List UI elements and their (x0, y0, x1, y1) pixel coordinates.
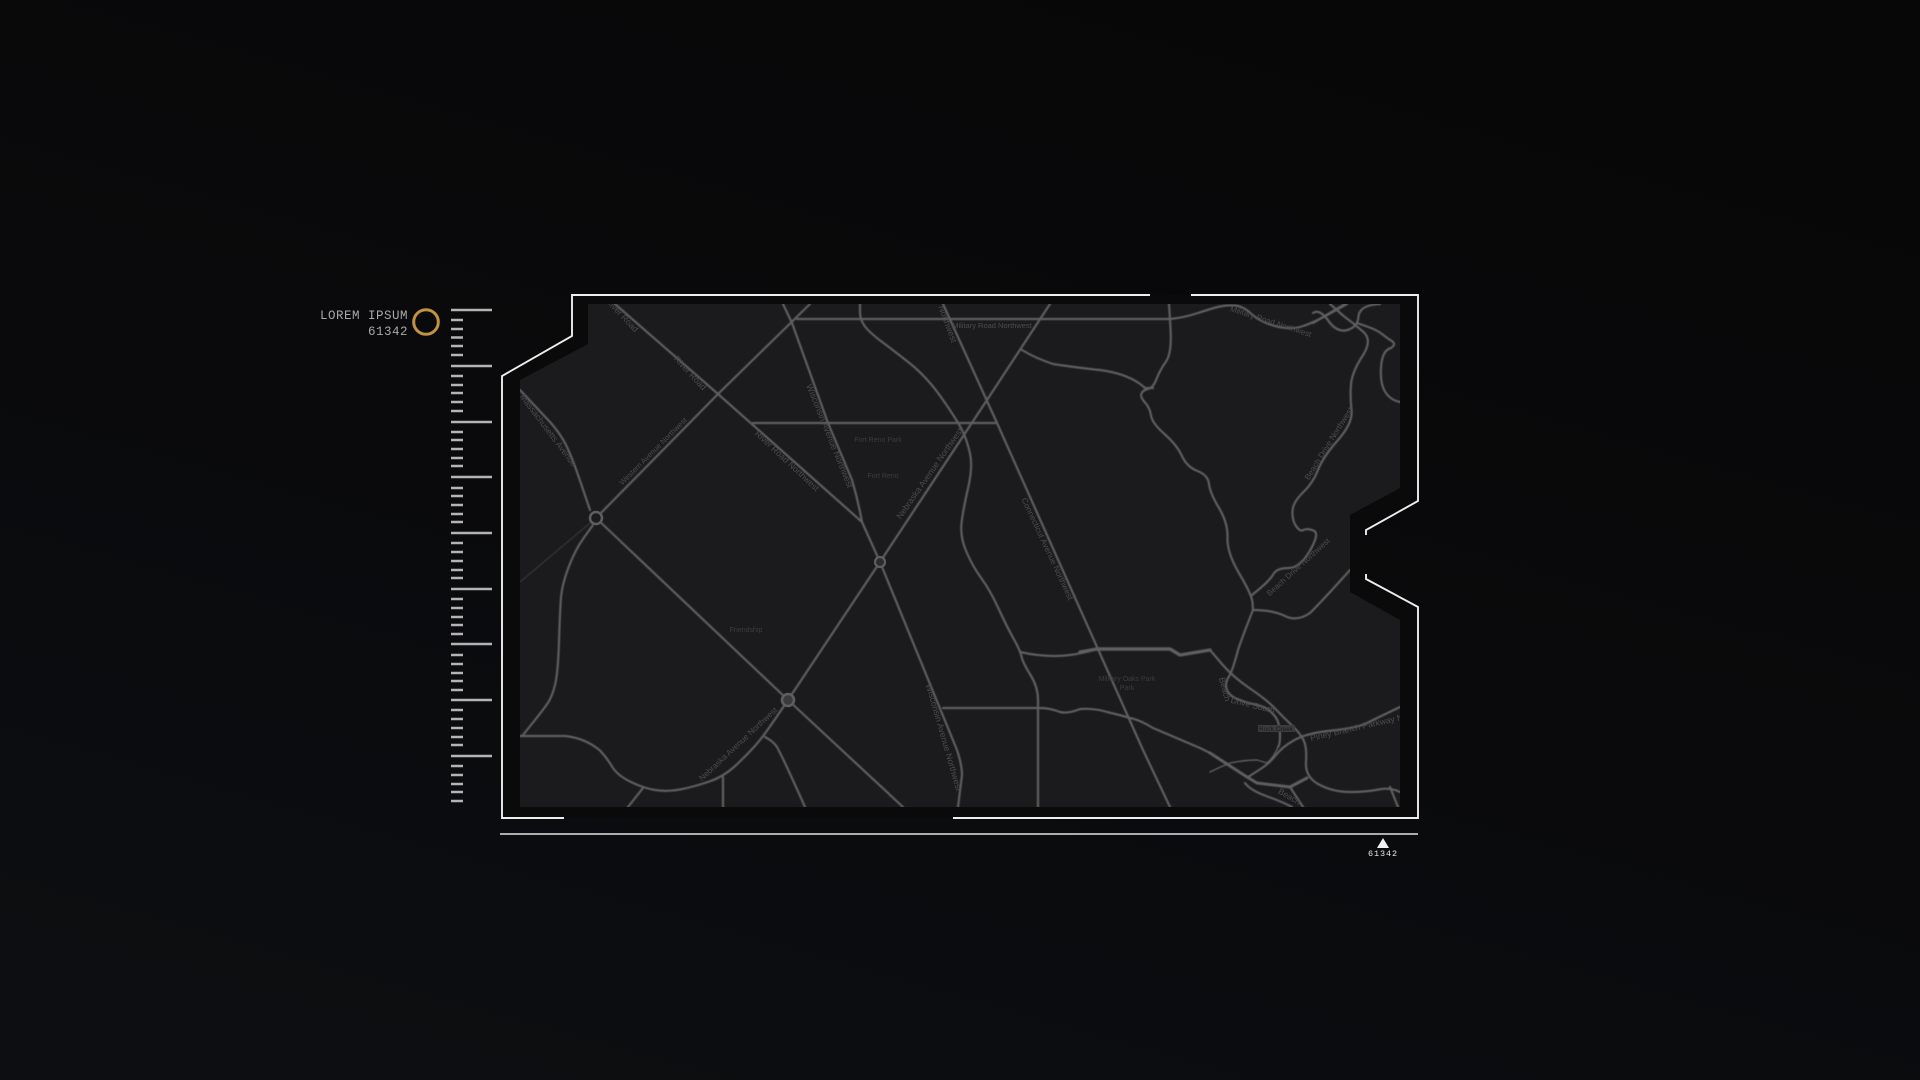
street labels: Beach Drive Northwest (1265, 536, 1332, 598)
street labels: River Road Northwest (753, 428, 822, 494)
label text: lorem ipsum: LOREM IPSUM (320, 309, 408, 323)
panel: map (518, 296, 1436, 807)
street labels: Wisconsin Avenue Northwest (804, 382, 855, 490)
marker: triangle and value: 61342 (1368, 849, 1398, 859)
street labels: River Road (604, 296, 641, 334)
road network (520, 304, 1400, 807)
street labels: Massachusetts Avenue (518, 392, 579, 469)
street labels: Wisconsin Avenue Northwest (924, 682, 964, 793)
panel: frame backing (502, 295, 1418, 818)
icon: orange ring (414, 310, 438, 334)
street labels: Connecticut Avenue Northwest (1020, 496, 1075, 602)
marker: triangle and value (1368, 838, 1398, 859)
street labels: River Road (672, 354, 709, 392)
street labels: Military Road Northwest (952, 321, 1033, 330)
street labels: Piney Branch Parkway Northwest (1309, 704, 1436, 743)
street labels: Beach (1217, 676, 1233, 702)
street labels: Beach Drive Northwest (1303, 405, 1355, 482)
street labels: Nebraska Avenue Northwest (894, 425, 965, 521)
street labels: Drive South (1230, 695, 1276, 715)
street labels: Western Avenue Northwest (618, 415, 689, 487)
street labels: Northwest (937, 304, 959, 344)
street labels (518, 296, 1436, 807)
ruler (451, 310, 492, 801)
street labels: Nebraska Avenue Northwest (697, 705, 780, 783)
street labels: Fort Reno Park (854, 437, 902, 444)
frame outline (502, 295, 1418, 818)
street labels: Military Road Northwest (1229, 304, 1313, 339)
bottom rule (500, 833, 1418, 835)
street labels: Beach (1276, 786, 1303, 807)
street labels: Fort Reno (867, 473, 899, 480)
roundabouts (590, 512, 885, 706)
label: rock creek pill (1258, 725, 1295, 732)
label text: lorem ipsum: 61342 (368, 325, 408, 339)
label: rock creek pill: Rock Creek (1259, 726, 1294, 733)
street labels: Military Oaks Park (1099, 676, 1156, 683)
street labels: Friendship (730, 627, 762, 634)
street labels: Park (1120, 685, 1135, 692)
label text: lorem ipsum (320, 309, 408, 339)
